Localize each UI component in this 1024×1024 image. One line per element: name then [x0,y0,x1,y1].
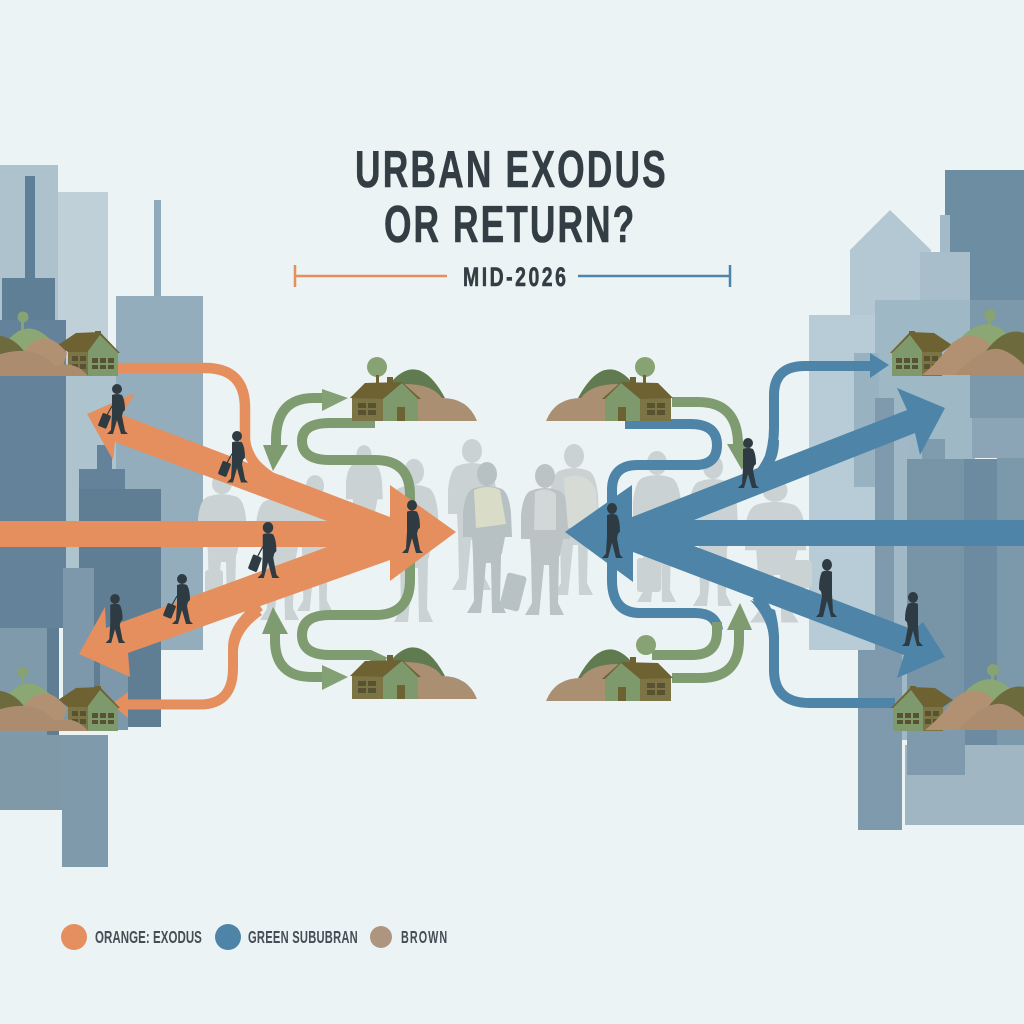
title [355,141,666,254]
ghosted crowd of travellers [198,439,812,622]
left city skyline [0,165,203,867]
suburb cluster: top right [890,309,1024,376]
big orange arrow set converging to the centre [0,393,456,677]
house: centre bottom right [546,635,673,701]
legend [61,924,447,950]
green route: long S curve [302,423,410,662]
walking silhouettes on the orange arrows [98,384,423,643]
suburb cluster: bottom right [891,664,1024,731]
legend: GREEN SUBUBRAN [248,927,358,948]
green route: right-side lower curves [652,603,752,678]
legend: BROWN [401,928,447,948]
title: URBAN EXODUS [355,141,666,199]
title: OR RETURN? [384,196,634,254]
green route: bottom-left double curve [262,607,348,690]
subtitle with date range line: MID-2026 [463,262,566,292]
green route: top-left double curve [263,389,348,471]
house: centre top right [546,357,673,421]
right city skyline [809,170,1024,830]
suburb cluster: top left [0,312,120,376]
house: centre top left [350,357,477,421]
blue curved arrow: lower branch [750,596,895,703]
blue curved arrow: upper branch [755,353,889,478]
orange curved arrow: top branch [118,368,285,482]
blue route: S curve [612,424,718,630]
orange curved arrow: bottom branch [112,600,262,718]
house: centre bottom left [350,647,477,699]
big blue arrow set converging to the centre [565,388,1024,678]
subtitle with date range line [295,262,730,292]
legend: ORANGE: EXODUS [95,928,202,948]
walking silhouettes on the blue arrows [602,438,923,646]
suburb cluster: bottom left [0,666,120,731]
foreground travellers with backpack [463,462,598,615]
green route: right-side upper curve [672,402,752,470]
